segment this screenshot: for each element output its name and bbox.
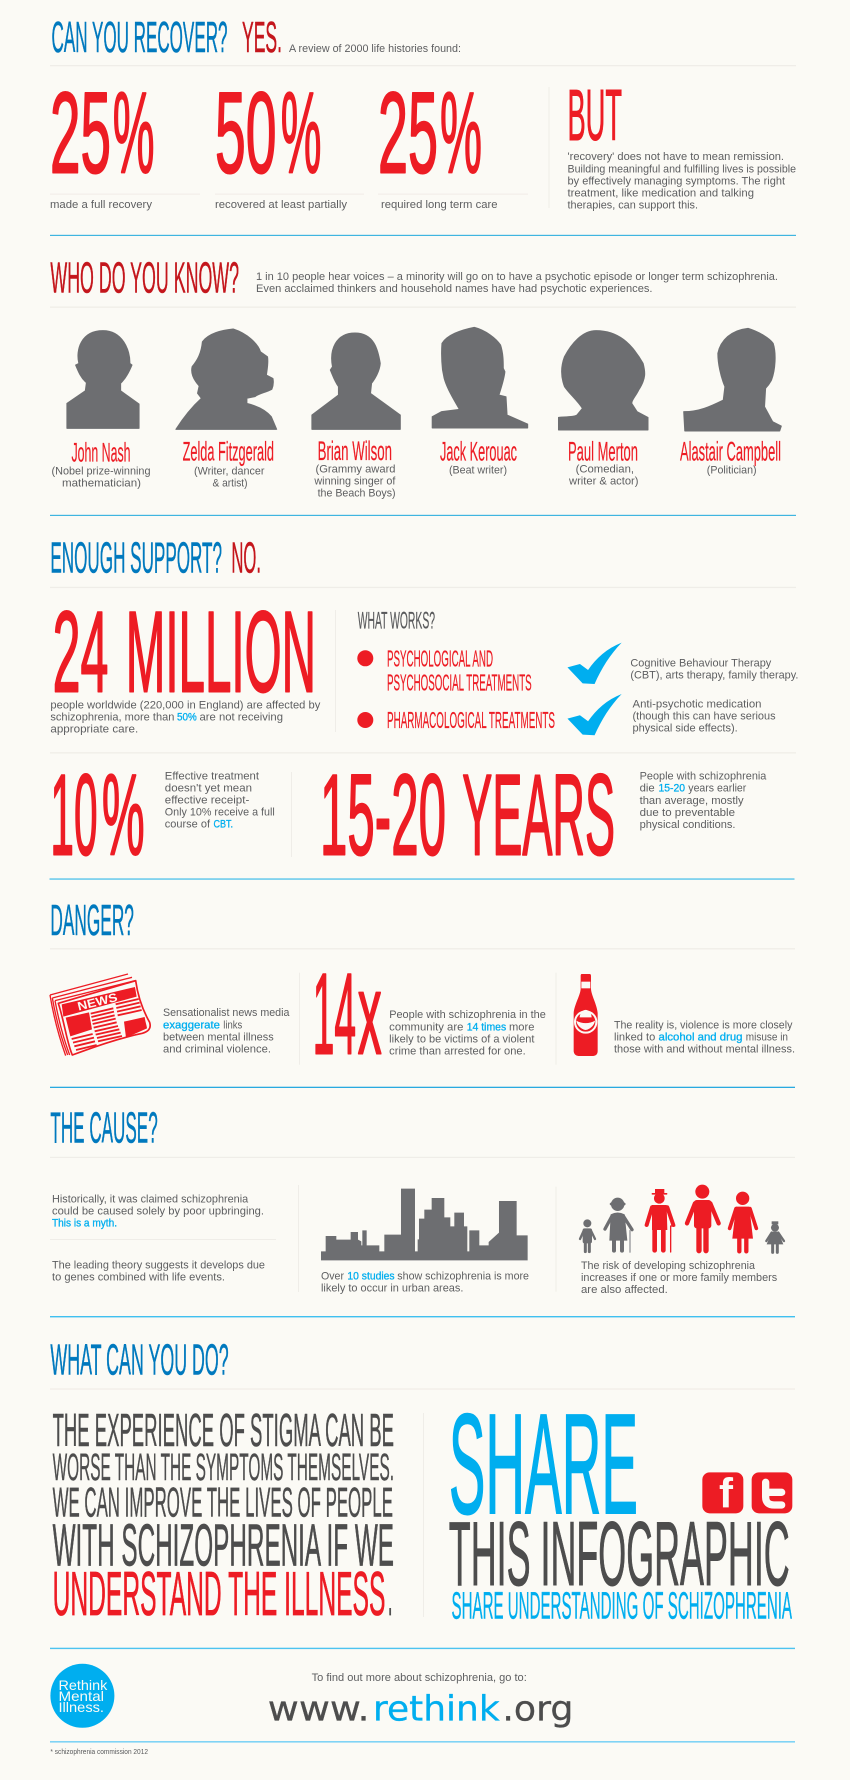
label: John Nash: John Nash bbox=[72, 437, 130, 467]
figure: girl bbox=[766, 1221, 784, 1252]
text: victims of violent crime: more bbox=[509, 1021, 534, 1033]
text: alcohol and drug misuse: alcohol and drug bbox=[658, 1031, 742, 1043]
text: leading theory bbox=[52, 1259, 265, 1283]
stat: 15-20 years: due to preventable bbox=[640, 807, 735, 819]
section: what can you do bbox=[50, 1335, 795, 1629]
icon: family bbox=[580, 1185, 784, 1252]
section: who do you know: WHO DO YOU KNOW? bbox=[50, 254, 239, 303]
icon: newspaper: NEWS bbox=[76, 990, 119, 1014]
icon: bottle bbox=[574, 974, 598, 1056]
text: urban areas bbox=[321, 1271, 529, 1295]
text: medication: Anti-psychotic medication bbox=[632, 698, 762, 710]
silhouette: Paul Merton bbox=[559, 331, 648, 430]
label: Brian Wilson: winning singer of bbox=[313, 476, 396, 488]
stat: 10 percent: % bbox=[102, 752, 145, 880]
stat: 24 million: people worldwide (220,000 in England) are affected by bbox=[50, 700, 321, 712]
stat: 24 million: are not receiving bbox=[200, 712, 283, 724]
url: www.rethink.org: rethink bbox=[373, 1690, 500, 1730]
text: urban areas: 10 studies bbox=[347, 1271, 395, 1283]
figure: boy bbox=[580, 1219, 595, 1252]
icon: check mark two bbox=[567, 694, 622, 735]
icon: facebook bbox=[702, 1470, 743, 1516]
label: Zelda Fitzgerald: & artist) bbox=[212, 477, 248, 489]
text: alcohol and drug misuse: linked to bbox=[614, 1031, 655, 1043]
section: enough support bbox=[50, 534, 798, 880]
bullet: pharmacological treatments bbox=[357, 707, 555, 733]
footnote: * schizophrenia commission 2012 bbox=[50, 1747, 148, 1756]
text: medication: physical side effects). bbox=[632, 723, 738, 735]
label: Alastair Campbell bbox=[680, 437, 781, 476]
stat: 10 percent: course of bbox=[165, 819, 211, 831]
section: enough support: NO. bbox=[231, 534, 261, 583]
figure: grandmother bbox=[605, 1198, 632, 1252]
text: talking therapies: (CBT), arts therapy, family therapy. bbox=[630, 669, 798, 681]
stat: 14x: 14 bbox=[313, 950, 356, 1078]
stat: 10 percent: Only 10% receive a full bbox=[165, 806, 275, 818]
section: can you recover bbox=[50, 13, 796, 211]
section: what can you do: . bbox=[388, 1560, 392, 1629]
label: Paul Merton: writer & actor) bbox=[568, 476, 638, 488]
stat: 25 percent full recovery: 25 bbox=[50, 70, 111, 198]
stat: 25 percent long term care: 25 bbox=[378, 70, 438, 198]
text: sensationalist news media: and criminal violence. bbox=[163, 1043, 271, 1055]
text: leading theory: The leading theory suggests it develops due bbox=[52, 1259, 265, 1271]
text: upbringing myth: Historically, it was claimed schizophrenia bbox=[52, 1193, 249, 1205]
text: leading theory: to genes combined with life events. bbox=[52, 1271, 225, 1283]
icon: twitter bbox=[752, 1472, 792, 1513]
figure: man bbox=[687, 1185, 719, 1251]
bullet: psychological treatments bbox=[357, 646, 532, 696]
callout: but: by effectively managing symptoms. The right bbox=[568, 175, 785, 187]
stat: 10 percent bbox=[50, 752, 275, 880]
stat: 15-20 years: YEARS bbox=[462, 752, 615, 880]
text: victims of violent crime: likely to be victims of a violent bbox=[389, 1033, 534, 1045]
section: the cause bbox=[50, 1104, 795, 1296]
text: victims of violent crime bbox=[389, 1009, 546, 1057]
text: sensationalist news media: exaggerate bbox=[163, 1019, 220, 1031]
callout: but bbox=[568, 76, 796, 211]
silhouette: Zelda Fitzgerald bbox=[176, 329, 276, 429]
stat: 10 percent: effective receipt- bbox=[165, 794, 250, 806]
text: family risk: increases if one or more family members bbox=[581, 1272, 778, 1284]
callout: but: BUT bbox=[568, 76, 622, 156]
section: the cause: THE CAUSE? bbox=[50, 1104, 158, 1153]
silhouette: Brian Wilson bbox=[312, 333, 400, 429]
section: danger bbox=[50, 896, 795, 1078]
text: victims of violent crime: People with schizophrenia in the bbox=[389, 1009, 546, 1021]
url: www.rethink.org: .org bbox=[502, 1690, 573, 1730]
section: can you recover: CAN YOU RECOVER? bbox=[52, 13, 228, 62]
label: Brian Wilson bbox=[313, 436, 396, 500]
text: family risk: The risk of developing schizophrenia bbox=[581, 1260, 756, 1272]
text: urban areas: show schizophrenia is more bbox=[397, 1271, 529, 1283]
logo: Rethink Mental Illness: Mental bbox=[58, 1688, 104, 1704]
section: who do you know: Zelda Fitzgerald bbox=[183, 437, 274, 467]
text: alcohol and drug misuse: those with and without mental illness. bbox=[614, 1043, 795, 1055]
label: Jack Kerouac: (Beat writer) bbox=[449, 464, 507, 476]
text: urban areas: likely to occur in urban areas. bbox=[321, 1283, 463, 1295]
text: family risk: are also affected. bbox=[581, 1284, 668, 1296]
statement: stigma bbox=[53, 1404, 394, 1629]
call to action: share bbox=[449, 1385, 792, 1627]
section: danger: DANGER? bbox=[50, 896, 134, 945]
text: sensationalist news media: Sensationalist news media bbox=[163, 1007, 290, 1019]
logo: Rethink Mental Illness: Illness. bbox=[58, 1699, 104, 1715]
callout: but: treatment, like medication and talking bbox=[568, 187, 754, 199]
text: sensationalist news media: between mental illness bbox=[163, 1031, 274, 1043]
panel: what works: PHARMACOLOGICAL TREATMENTS bbox=[387, 707, 555, 733]
silhouette: Jack Kerouac bbox=[433, 327, 527, 428]
panel: what works: PSYCHOSOCIAL TREATMENTS bbox=[387, 670, 532, 696]
label: Brian Wilson: (Grammy award bbox=[316, 463, 396, 475]
stat: 10 percent: 10 bbox=[50, 752, 98, 880]
icon: facebook: f bbox=[719, 1470, 733, 1516]
stat: 25 percent full recovery: % bbox=[113, 70, 154, 198]
label: Brian Wilson: the Beach Boys) bbox=[318, 488, 396, 500]
text: victims of violent crime: 14 times bbox=[467, 1021, 507, 1033]
stat: 15-20 years: 15-20 bbox=[658, 783, 685, 795]
logo: Rethink Mental Illness bbox=[50, 1664, 114, 1728]
intro text: A review of 2000 life histories found: bbox=[289, 43, 461, 55]
text: medication: (though this can have serious bbox=[632, 711, 776, 723]
section: who do you know: Jack Kerouac bbox=[440, 437, 517, 467]
label: John Nash: (Nobel prize-winning bbox=[52, 465, 150, 477]
section: enough support: MILLION bbox=[126, 589, 316, 717]
stat: 24 million: 50% bbox=[177, 712, 197, 724]
icon: city skyline bbox=[321, 1189, 528, 1260]
stat: 50 percent partial recovery: % bbox=[281, 70, 322, 198]
text: alcohol and drug misuse bbox=[614, 1019, 795, 1055]
label: Jack Kerouac bbox=[440, 437, 517, 476]
stat: 25 percent long term care: required long term care bbox=[381, 199, 498, 211]
text: sensationalist news media: links bbox=[223, 1019, 243, 1031]
label: Alastair Campbell: (Politician) bbox=[707, 464, 757, 476]
footer bbox=[50, 1664, 795, 1756]
callout: but: 'recovery' does not have to mean remission. bbox=[568, 151, 784, 163]
stat: 50 percent partial recovery: recovered at least partially bbox=[215, 199, 348, 211]
stat: 15-20 years: die bbox=[640, 783, 655, 795]
stat: 10 percent: Effective treatment bbox=[165, 770, 259, 782]
text: talking therapies bbox=[630, 657, 798, 681]
stat: 50 percent partial recovery: 50 bbox=[215, 70, 276, 198]
icon: check mark one bbox=[567, 643, 622, 684]
stat: 24 million bbox=[50, 589, 321, 736]
section: who do you know: Paul Merton bbox=[568, 437, 638, 467]
label: Brian Wilson: Brian Wilson bbox=[318, 436, 392, 466]
stat: 24 million: schizophrenia, more than bbox=[50, 712, 174, 724]
stat: 25 percent full recovery: made a full recovery bbox=[50, 199, 153, 211]
silhouette: John Nash bbox=[67, 331, 139, 428]
section: danger: x bbox=[358, 950, 382, 1078]
text: sensationalist news media bbox=[163, 1007, 290, 1055]
stat: 10 percent: CBT. bbox=[214, 819, 233, 831]
text: victims of violent crime: community are bbox=[389, 1021, 463, 1033]
section: what can you do: WHAT CAN YOU DO? bbox=[50, 1335, 229, 1384]
figure: woman bbox=[730, 1192, 756, 1251]
text: urban areas: Over bbox=[321, 1271, 344, 1283]
text: upbringing myth: could be caused solely by poor upbringing. bbox=[52, 1205, 264, 1217]
bullet: psychological treatments: PSYCHOLOGICAL AND bbox=[387, 646, 493, 672]
stat: 15-20 years: years earlier bbox=[688, 783, 747, 795]
label: John Nash bbox=[52, 437, 150, 489]
text: alcohol and drug misuse: misuse in bbox=[746, 1031, 788, 1043]
text: find out more: To find out more about schizophrenia, go to: bbox=[312, 1672, 527, 1684]
section: enough support: ENOUGH SUPPORT? bbox=[50, 534, 222, 583]
text: talking therapies: Cognitive Behaviour Therapy bbox=[630, 657, 772, 669]
logo: Rethink Mental Illness: Rethink bbox=[58, 1677, 108, 1693]
stat: 24 million: appropriate care. bbox=[50, 724, 138, 736]
callout: but: Building meaningful and fulfilling lives is possible bbox=[568, 163, 796, 175]
section: can you recover: YES. bbox=[242, 13, 282, 62]
intro text: Even acclaimed thinkers and household names have had psychotic experiences. bbox=[256, 283, 652, 295]
stat: 25 percent long term care: % bbox=[440, 70, 482, 198]
stat: 14x bbox=[313, 950, 382, 1078]
label: Zelda Fitzgerald bbox=[183, 437, 274, 489]
intro text: 1 in 10 people hear voices – a minority will go on to have a psychotic episode or longer term schizophrenia. bbox=[256, 271, 778, 283]
intro text bbox=[256, 271, 778, 295]
stat: 15-20 years: than average, mostly bbox=[640, 795, 744, 807]
stat: 15-20 years bbox=[320, 752, 767, 880]
text: family risk bbox=[581, 1260, 778, 1296]
stat: 24 million: 24 bbox=[53, 589, 108, 717]
stat: 15-20 years: People with schizophrenia bbox=[640, 771, 767, 783]
panel: what works bbox=[357, 607, 798, 735]
figure: grandfather bbox=[647, 1189, 675, 1252]
url: www.rethink.org bbox=[268, 1690, 573, 1730]
url: www.rethink.org: www. bbox=[268, 1690, 370, 1730]
silhouette: Alastair Campbell bbox=[684, 328, 781, 431]
label: Zelda Fitzgerald: (Writer, dancer bbox=[194, 465, 265, 477]
text: upbringing myth: This is a myth. bbox=[52, 1217, 117, 1229]
label: John Nash: mathematician) bbox=[62, 477, 141, 489]
text: medication bbox=[632, 698, 776, 735]
stat: 10 percent: doesn't yet mean bbox=[165, 782, 252, 794]
stat: 15-20 years: physical conditions. bbox=[640, 819, 736, 831]
text: upbringing myth bbox=[52, 1193, 264, 1229]
panel: what works: WHAT WORKS? bbox=[358, 607, 435, 634]
label: Paul Merton: (Comedian, bbox=[576, 463, 634, 475]
label: Paul Merton bbox=[568, 437, 638, 488]
section: who do you know bbox=[50, 254, 796, 500]
stat: 15-20 years: 15-20 bbox=[320, 752, 446, 880]
icon: newspaper bbox=[50, 974, 150, 1056]
text: victims of violent crime: crime than arrested for one. bbox=[389, 1045, 526, 1057]
text: alcohol and drug misuse: The reality is, violence is more closely bbox=[614, 1019, 793, 1031]
callout: but: therapies, can support this. bbox=[568, 199, 698, 211]
